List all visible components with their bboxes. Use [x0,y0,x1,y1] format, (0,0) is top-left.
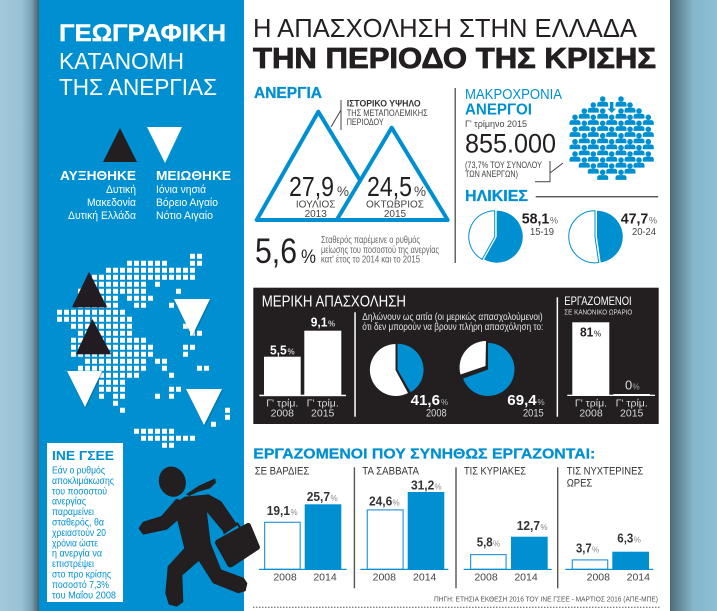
map marker: up, Western Greece [76,319,111,354]
heading: main title: Η ΑΠΑΣΧΟΛΗΣΗ ΣΤΗΝ ΕΛΛΑΔΑ [253,13,638,43]
bar chart: night hours: % [634,536,641,545]
callout: INE GSEE: παραμείνει [52,506,95,518]
callout: INE GSEE: χρόνια ώστε [52,537,98,549]
value: July 2013: % [337,183,349,199]
legend list: increased [60,169,137,222]
bar chart: part-time share: 9,1 [311,315,327,330]
value: ages 15-19: % [550,215,558,225]
bar chart: night hours: 6,3 [617,531,633,546]
value: 5.6 percent: 5,6 [255,232,297,271]
callout: INE GSEE: αποκλιμάκωσης [52,475,114,487]
panel background [253,288,659,424]
bar chart: regular-hours employees: 2015 [620,408,644,420]
note: rate of decrease: κατ' έτος το 2014 και το 2015 [321,254,420,266]
note: share of the unemployed: (73,7% ΤΟΥ ΣΥΝΟΛΟΥ [465,160,542,170]
value: October 2015: 24,5 [367,171,412,202]
heading: long-term unemployed: ΜΑΚΡΟΧΡΟΝΙΑ [465,86,562,103]
bar chart: part-time share: Γ' τρίμ. [266,398,298,410]
legend list: decreased: ΜΕΙΩΘΗΚΕ [156,169,231,183]
panel: employees who usually work [253,446,653,588]
bar chart: Sundays: 12,7 [517,518,540,533]
bar chart: Saturdays: ΤΑ ΣΑΒΒΑΤΑ [362,465,420,477]
bar chart: regular-hours employees: % [632,382,640,392]
bar chart: night hours: ΩΡΕΣ [567,478,592,490]
divider [557,297,558,417]
heading: geographic distribution: ΓΕΩΓΡΑΦΙΚΗ [59,20,226,47]
callout: historic high: ΙΣΤΟΡΙΚΟ ΥΨΗΛΟ [347,99,421,109]
bar chart: regular-hours employees: % [594,330,601,339]
divider [354,312,356,417]
panel: unemployment [254,85,448,271]
divider [557,467,558,588]
source note: ΠΗΓΗ: ΕΤΗΣΙΑ ΕΚΘΕΣΗ 2016 ΤΟΥ ΙΝΕ ΓΣΕΕ - ΜΑΡΤΙΟΣ 2016 (ΑΠΕ-ΜΠΕ) [434,595,658,604]
map marker: down, Ionian Islands [67,371,102,407]
note: rate of decrease [321,234,439,266]
bar chart: regular-hours employees [567,322,655,420]
bar chart: night hours: 2008 [587,571,610,583]
value: 41.6 percent 2008 [411,392,448,420]
note: rate of decrease: Σταθερός παρέμεινε ο ρυθμός [321,234,420,246]
callout: historic high [331,99,428,130]
legend list: increased: Δυτική [106,184,136,196]
value: 69.4 percent 2015: % [538,398,545,407]
icon: down arrow [607,102,616,113]
value: ages 15-19: 15-19 [530,227,554,238]
divider between top panels [454,88,456,263]
value: 5.6 percent: % [301,247,316,268]
bar chart: regular-hours employees: 81 [580,325,593,340]
callout: INE GSEE: επιστρέψει [52,558,95,570]
bar chart: part-time share: 2015 [311,408,335,420]
heading: main title [253,13,656,75]
bar chart: Saturdays: 2008 [373,571,396,583]
bar chart: Saturdays [360,465,448,583]
heading: ages: ΗΛΙΚΙΕΣ [465,188,528,205]
bar chart: Sundays: 2008 [474,571,498,583]
value: July 2013: ΙΟΥΛΙΟΣ [296,200,335,210]
callout: INE GSEE: στο προ κρίσης [52,568,111,580]
callout: INE GSEE: Εάν ο ρυθμός [52,464,105,476]
head [155,463,190,500]
value: 69.4 percent 2015: 69,4 [507,392,537,409]
briefcase [215,523,260,568]
value: ages 20-24 [621,210,657,238]
bar chart: Sundays [464,465,552,583]
callout: historic high: ΤΗΣ ΜΕΤΑΠΟΛΕΜΙΚΗΣ [347,108,428,118]
callout: INE GSEE: ανεργίας [52,496,86,508]
callout: INE GSEE [47,443,123,602]
bar chart: Sundays: ΤΙΣ ΚΥΡΙΑΚΕΣ [464,465,526,477]
icon: running businessman with briefcase [139,463,260,606]
text: reason for part-time work: Δηλώνουν ως αιτία (οι μερικώς απασχολούμενοι) [362,311,543,323]
body silhouette: torso, arms and legs [139,495,247,606]
page background: left band [0,0,39,611]
bar chart: part-time share: 5,5 [270,342,287,357]
panel: geographic distribution [39,0,244,611]
value: 855,000: 855.000 [465,128,556,158]
text: reason for part-time work [362,311,543,333]
heading: part-time employment: ΜΕΡΙΚΗ ΑΠΑΣΧΟΛΗΣΗ [262,294,406,311]
bar chart: Saturdays: % [434,482,442,491]
bar chart: Sundays: % [493,540,500,549]
note: share of the unemployed: ΤΩΝ ΑΝΕΡΓΩΝ) [465,169,518,179]
text: reason for part-time work: ότι δεν μπορούν να βρουν πλήρη απασχόληση το: [362,321,543,333]
bar chart: regular-hours employees: Γ' τρίμ. [575,398,607,410]
legend list: decreased: Ιόνια νησιά [156,184,207,196]
bar chart: night hours [565,465,653,583]
bar chart: part-time share: 2008 [271,408,294,420]
value: ages 20-24: % [649,215,657,225]
heading: unemployment: ΑΝΕΡΓΙΑ [254,85,322,102]
value: 69.4 percent 2015: 2015 [523,408,544,420]
legend list: decreased: Βόρειο Αιγαίο [156,197,218,209]
callout: historic high: ΠΕΡΙΟΔΟΥ [347,117,384,127]
bar chart: shifts: % [330,494,338,503]
bar chart: night hours: 3,7 [576,540,592,555]
value: 41.6 percent 2008: 2008 [426,408,447,420]
pie chart: 2008 [370,344,424,396]
white content sheet [244,0,670,611]
value: ages 15-19: 58,1 [522,210,549,227]
value: 69.4 percent 2015 [507,392,545,420]
value: July 2013: 2013 [305,209,327,220]
bar chart: night hours: % [592,545,599,554]
briefcase handle [223,523,240,534]
pie chart: 2015 [460,341,514,396]
map marker: down, North Aegean [174,299,210,336]
heading: employees who usually work: ΕΡΓΑΖΟΜΕΝΟΙ ΠΟΥ ΣΥΝΗΘΩΣ ΕΡΓΑΖΟΝΤΑΙ: [253,446,595,462]
heading: geographic distribution: ΤΗΣ ΑΝΕΡΓΙΑΣ [59,74,217,100]
heading: long-term unemployed: ΑΝΕΡΓΟΙ [465,102,532,118]
value: October 2015: ΟΚΤΩΒΡΙΟΣ [366,200,424,210]
heading: regular-hours employees [564,296,633,316]
bar chart: part-time share: % [288,347,295,356]
bar chart: part-time share [259,315,346,420]
pie chart: ages 15-19 [469,211,523,263]
callout: INE GSEE: ΙΝΕ ΓΣΕΕ [52,448,114,463]
callout: INE GSEE: σταθερός, θα [52,516,104,528]
heading: long-term unemployed [465,86,562,118]
divider [455,467,457,588]
value: July 2013: 27,9 [289,171,334,202]
map marker: down, South Aegean [186,389,222,425]
value: ages 20-24: 47,7 [621,210,648,227]
mountain peaks chart [257,112,448,220]
callout: INE GSEE: του ποσοστού [52,485,107,497]
leader line [535,161,563,182]
tie [186,478,216,496]
value: October 2015: % [414,183,426,199]
bar chart: shifts [255,465,347,583]
bar chart: Sundays: 5,8 [477,535,493,550]
bar chart: shifts: 2008 [273,571,297,583]
bar chart: Saturdays: % [392,499,400,508]
map marker: up, Western Macedonia [72,272,107,307]
legend list: decreased [156,169,231,222]
legend list: decreased: Νότιο Αιγαίο [156,210,213,222]
heading: regular-hours employees: ΣΕ ΚΑΝΟΝΙΚΟ ΩΡΑΡΙΟ [564,309,633,316]
heading rule [536,196,658,197]
callout: INE GSEE: του Μαΐου 2008 [52,589,116,601]
panel: part-time employment [253,288,659,424]
bar chart: night hours: ΤΙΣ ΝΥΧΤΕΡΙΝΕΣ [567,465,643,477]
bar chart: part-time share: % [328,320,335,329]
panel: ages [465,188,658,263]
value: July 2013 [289,171,349,220]
heading: geographic distribution [59,20,226,100]
value: 41.6 percent 2008: % [441,398,448,407]
heading: main title: ΤΗΝ ΠΕΡΙΟΔΟ ΤΗΣ ΚΡΙΣΗΣ [253,43,656,75]
value: ages 15-19 [522,210,558,238]
bar chart: regular-hours employees: 0 [625,378,632,392]
heading: geographic distribution: ΚΑΤΑΝΟΜΗ [59,48,184,74]
callout: INE GSEE: η ανεργία να [52,548,102,560]
value: ages 20-24: 20-24 [632,227,656,238]
page background: right band [670,0,717,611]
bar chart: shifts: 2014 [313,571,337,583]
bar chart: Saturdays: 31,2 [411,477,434,492]
callout: INE GSEE: χρειαστούν 20 [52,527,106,539]
panel: long-term unemployed [465,86,654,182]
note: share of the unemployed [465,160,542,179]
bar chart: shifts: % [290,508,298,517]
bar chart: Sundays: 2014 [514,571,538,583]
bar chart: regular-hours employees: Γ' τρίμ. [616,398,648,410]
bar chart: shifts: 19,1 [267,503,290,518]
bar chart: part-time share: Γ' τρίμ. [307,398,339,410]
pie chart: ages 20-24 [569,211,623,263]
icon: crowd of people [570,96,654,180]
value: October 2015 [366,171,426,220]
bar chart: Saturdays: 24,6 [369,494,392,509]
legend list: increased: ΑΥΞΗΘΗΚΕ [60,169,136,183]
bar chart: night hours: 2014 [627,571,650,583]
bar chart: Sundays: % [540,523,548,532]
legend icon: decreased [147,127,182,163]
legend list: increased: Μακεδονία [87,197,137,209]
callout: INE GSEE: ποσοστό 7,3% [52,579,109,591]
bar chart: regular-hours employees: 2008 [579,408,603,420]
value: 41.6 percent 2008: 41,6 [411,392,440,409]
bar chart: shifts: ΣΕ ΒΑΡΔΙΕΣ [255,465,309,477]
heading: regular-hours employees: ΕΡΓΑΖΟΜΕΝΟΙ [564,296,632,308]
dot map of Greece [57,256,230,445]
legend icon: increased [103,128,137,162]
bar chart: shifts: 25,7 [307,489,330,504]
divider [354,467,355,588]
panel background [39,0,244,611]
legend list: increased: Δυτική Ελλάδα [68,210,137,222]
value: October 2015: 2015 [384,209,407,220]
period label: Γ' τρίμηνο 2015 [465,119,527,130]
note: rate of decrease: μείωσης του ποσοστού της ανεργίας [321,244,439,256]
bar chart: Saturdays: 2014 [413,571,437,583]
